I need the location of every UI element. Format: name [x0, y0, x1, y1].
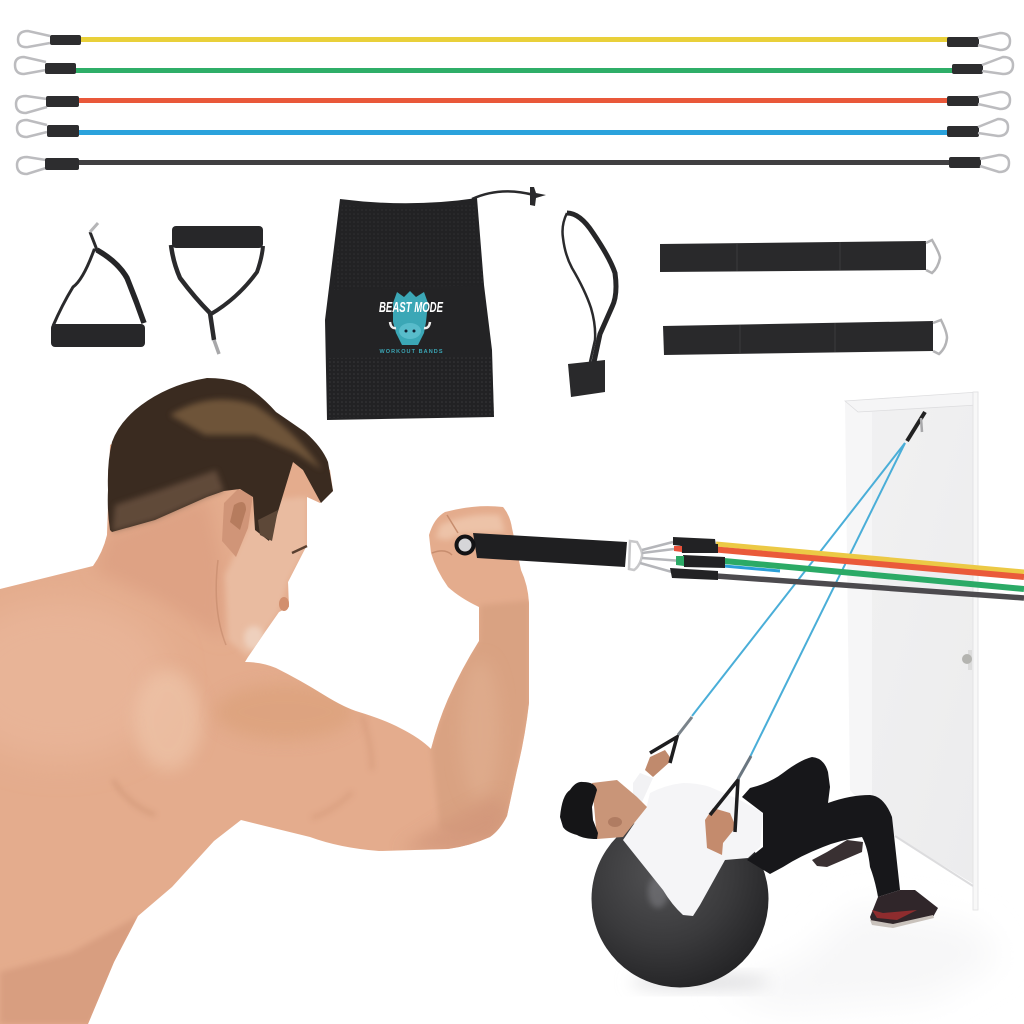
ear [608, 817, 622, 827]
hair fade [112, 470, 224, 532]
triceps crease [312, 716, 372, 818]
scapula highlight [134, 670, 202, 770]
bag mesh upper [334, 204, 484, 290]
lat crease [116, 784, 152, 814]
handle right [171, 226, 263, 354]
connectors [673, 537, 718, 553]
bag body [325, 198, 494, 420]
hair highlight [170, 399, 322, 470]
shoe accent [872, 910, 917, 920]
bag toggle [530, 187, 546, 206]
body shading [0, 497, 530, 1024]
trainer handles [650, 717, 751, 832]
body and arm [0, 378, 529, 1024]
lower back shadow [0, 915, 140, 1024]
far shoe [812, 840, 863, 867]
mesh bag [325, 187, 546, 420]
blue bands to door [650, 412, 925, 832]
sideburn [258, 510, 278, 541]
carabiners [640, 542, 682, 572]
finger crease [432, 515, 458, 555]
door bottom edge [895, 836, 973, 886]
hair [108, 378, 333, 541]
door anchor strap [562, 213, 616, 397]
band strap [473, 533, 627, 567]
bag drawstring [472, 191, 534, 199]
shoe sole [870, 915, 934, 928]
logo title: BEAST MODE [379, 300, 444, 316]
chin highlight [244, 626, 264, 650]
floor shadow area [720, 905, 1000, 1010]
raised sleeve [633, 773, 653, 802]
upper back tone [0, 614, 152, 746]
man on ball [560, 750, 938, 928]
ear [222, 489, 253, 557]
door panel [850, 404, 975, 885]
hair [560, 782, 598, 839]
pulled bands [456, 533, 1024, 598]
handle left [51, 223, 145, 347]
blue pulled band [724, 566, 780, 571]
jaw line [216, 560, 226, 645]
near shoe [870, 890, 938, 927]
exercise ball [592, 810, 770, 990]
door frame right [973, 392, 978, 910]
strap ring [629, 541, 642, 570]
chest hand [705, 808, 736, 855]
forearm tone [431, 600, 530, 837]
neck tone [94, 509, 216, 622]
face [592, 780, 647, 839]
brow [292, 546, 307, 553]
black band [17, 155, 1009, 174]
door frame top [845, 392, 978, 412]
door frame left [845, 401, 872, 806]
logo subtitle: WORKOUT BANDS [380, 349, 443, 355]
shoulder tone [215, 684, 355, 740]
muscular man [0, 378, 530, 1024]
ear inner [230, 502, 246, 530]
forearm highlight [469, 677, 491, 783]
bag mesh lower [327, 357, 494, 418]
ankle strap top [660, 240, 940, 273]
door anchor [907, 412, 925, 441]
red pulled band [716, 550, 1024, 577]
green band [15, 57, 1013, 74]
connector tips [674, 546, 682, 552]
nose [279, 597, 289, 611]
green pulled band [724, 561, 1024, 589]
door knob [962, 650, 972, 670]
yellow band [18, 31, 1010, 50]
door [845, 392, 978, 910]
face tone [225, 497, 307, 657]
shirt torso and arm [623, 783, 763, 916]
fist shading [436, 514, 505, 540]
resistance bands set [15, 31, 1013, 174]
trousers [742, 757, 900, 897]
logo boar [390, 291, 430, 345]
strap grommet [456, 536, 474, 554]
ankle strap bottom [663, 320, 947, 355]
yellow pulled band [716, 544, 1024, 572]
raised hand [645, 750, 672, 777]
blue band [17, 119, 1008, 137]
elbow shadow [414, 808, 508, 850]
red band [16, 92, 1010, 113]
black pulled band [716, 576, 1024, 598]
